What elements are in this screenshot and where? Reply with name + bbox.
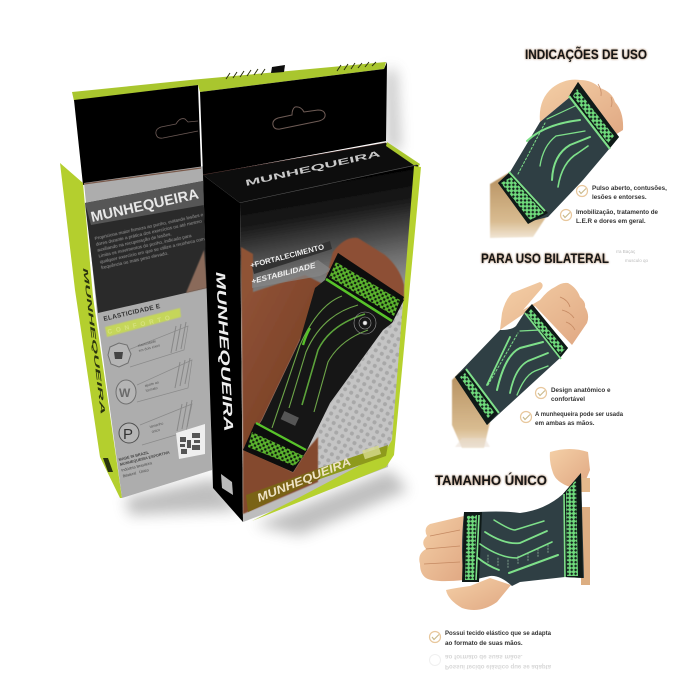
panel footer text <box>118 446 173 478</box>
claims <box>249 241 332 288</box>
panel description: frequência ou mais peso elevado. <box>101 251 169 270</box>
panel description <box>94 212 211 270</box>
photo: forearm and hand <box>452 282 588 448</box>
hexagon background <box>316 290 408 472</box>
icon row: hand: em dois eixos <box>138 343 161 353</box>
icon row: fabric <box>116 358 192 404</box>
front face <box>240 165 421 522</box>
upper cuff <box>569 82 619 148</box>
QR code <box>176 424 205 459</box>
back box <box>60 62 386 498</box>
thumb <box>446 578 511 610</box>
upper cuff <box>325 253 404 323</box>
checklist <box>560 185 667 263</box>
photo: hand and wrist <box>419 449 590 610</box>
lower cuff <box>455 369 499 425</box>
back box flap <box>74 85 201 185</box>
check item 2: A munhequeira pode ser usada <box>535 411 623 418</box>
icon row: fabric: ajuste ao <box>144 380 159 388</box>
panel subheading: ELASTICIDADE E <box>103 303 162 323</box>
checklist: musculo qo <box>625 258 649 263</box>
forearm photo, lower part <box>243 437 318 514</box>
panel description: qualquer exercício em que se utilize a munheca com <box>99 236 205 264</box>
heading: PARA USO BILATERAL <box>481 250 609 266</box>
icon row: fabric: formato <box>145 386 158 393</box>
icon row: size P <box>119 400 192 445</box>
panel description: Limita os movimentos do punho, indicado para <box>98 233 192 259</box>
check item: ao formato de suas mãos. <box>445 640 523 647</box>
check item 2: em ambas as mãos. <box>535 420 595 427</box>
check item 1 <box>576 185 667 201</box>
photo: forearm and hand <box>490 80 623 238</box>
front spine: MUNHEQUEIRA <box>213 271 236 432</box>
checklist: rra Baçaç <box>616 249 636 254</box>
icon row: fabric: W <box>119 386 131 400</box>
checklist <box>520 387 623 427</box>
panel subheading <box>103 303 181 337</box>
section 2: para uso bilateral <box>452 250 623 448</box>
panel footer text: MUNHEQUEIRA ESPORTIVA <box>119 450 170 467</box>
dark name band and description <box>85 181 211 313</box>
check item 1 <box>536 387 611 403</box>
check item <box>430 630 551 647</box>
section 3: tamanho único <box>419 449 590 670</box>
claims: +FORTALECIMENTO <box>249 242 325 270</box>
heading: TAMANHO ÚNICO <box>435 471 547 488</box>
panel description: auxiliando na recuperação de lesões. <box>97 231 172 253</box>
lime top strip <box>72 62 386 101</box>
lime edge <box>252 166 421 521</box>
top face <box>203 142 420 203</box>
panel title: MUNHEQUEIRA <box>89 186 201 226</box>
panel footer text: MADE IN BRAZIL <box>118 450 150 462</box>
sleeve <box>462 473 584 586</box>
panel footer text: Indústria Brasileira <box>121 461 153 473</box>
check item 2: L.E.R e dores em geral. <box>576 218 646 225</box>
box shadows <box>125 70 408 535</box>
stripes <box>518 106 590 187</box>
fist photo <box>325 238 404 300</box>
front flap <box>200 62 387 175</box>
finger cuff <box>462 512 482 582</box>
grey back panel <box>84 166 212 498</box>
mirrored reflection of check item <box>430 653 551 670</box>
check item 2: Imobilização, tratamento de <box>576 209 658 216</box>
panel footer text: Bilateral Único <box>122 467 149 478</box>
icon row: hand: elasticidade <box>137 339 157 348</box>
check item 1: lesões e entorses. <box>592 194 647 201</box>
front spine <box>203 175 243 522</box>
check item 2 <box>560 209 658 225</box>
front box <box>200 62 421 522</box>
pressure point target <box>354 312 376 334</box>
mirrored reflection of check item: Possui tecido elástico que se adapta <box>445 663 551 670</box>
panel description: dores durante a prática dos exercícios ou até mesmo <box>95 218 203 247</box>
section 1: indicações de uso <box>490 45 667 263</box>
icon row: size P: tamanho <box>149 421 164 429</box>
heading: PARA USO BILATERAL <box>481 250 609 266</box>
name banner <box>246 445 388 512</box>
check item 2 <box>520 411 623 427</box>
check item 1: Design anatômico e <box>551 387 611 394</box>
icon row: size P: P <box>123 426 133 443</box>
lower cuff <box>498 172 548 224</box>
claims: +ESTABILIDADE <box>250 260 317 286</box>
icon row: size P: único <box>151 428 161 434</box>
fingers <box>419 516 464 581</box>
lime side spine: MUNHEQUEIRA <box>81 267 106 416</box>
name banner: MUNHEQUEIRA <box>256 456 353 505</box>
wrist cuff <box>563 473 583 578</box>
lower cuff <box>243 423 307 472</box>
mirrored reflection of check item: ao formato de suas mãos. <box>445 653 523 660</box>
forearm photo, upper part <box>241 247 325 450</box>
top face: MUNHEQUEIRA <box>244 148 381 188</box>
check item: Possui tecido elástico que se adapta <box>445 630 551 637</box>
upper hand <box>550 449 590 487</box>
check item 1: confortável <box>551 396 585 403</box>
wrist sleeve <box>243 253 404 472</box>
sleeve stripes <box>272 296 368 428</box>
stripes <box>487 330 548 395</box>
heading: TAMANHO ÚNICO <box>435 471 547 488</box>
panel description: Propriciona maior firmeza ao punho, evitando lesões e <box>94 212 204 241</box>
panel subheading: CONFORTO <box>107 315 171 336</box>
icon row: hand <box>108 322 188 367</box>
upper cuff <box>525 304 568 358</box>
lime side spine <box>60 163 122 498</box>
heading: INDICAÇÕES DE USO <box>525 45 647 62</box>
stripes <box>478 520 558 573</box>
heading: INDICAÇÕES DE USO <box>525 45 647 62</box>
check item 1: Pulso aberto, contusões, <box>592 185 667 192</box>
